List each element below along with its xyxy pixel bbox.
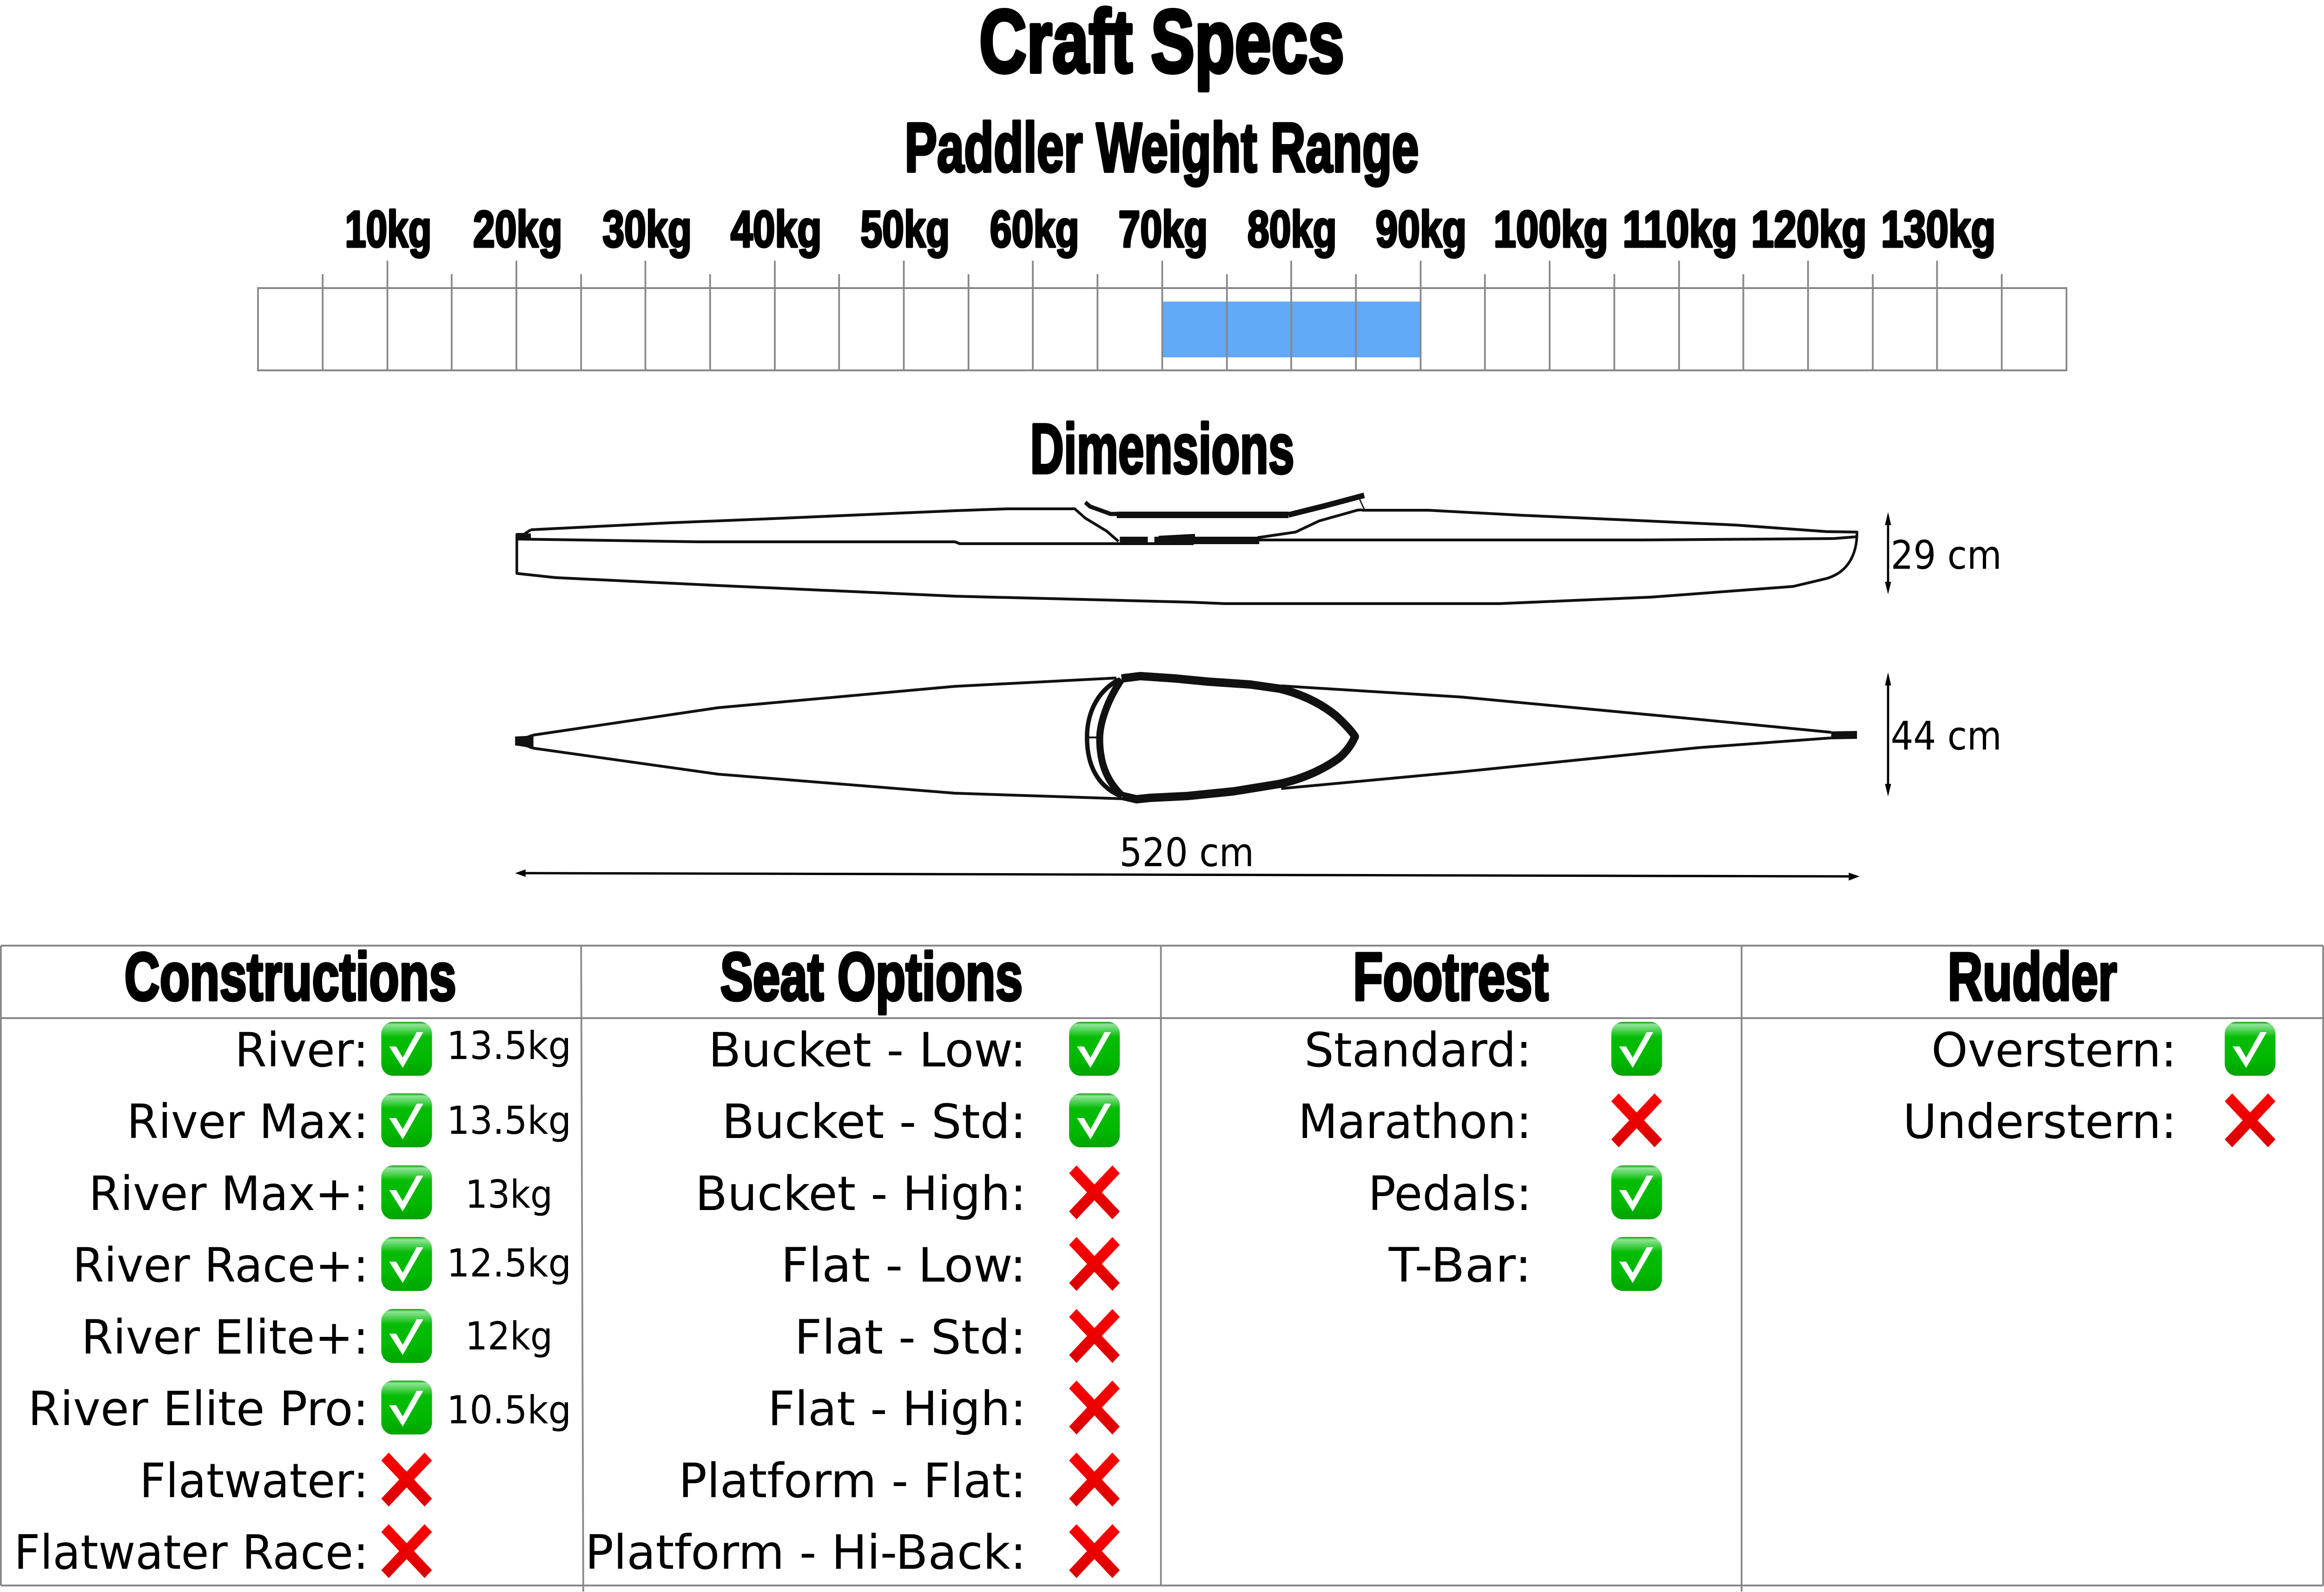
row: Flat - High: Flat - High:: [768, 1381, 1026, 1437]
row: River: [235, 1022, 571, 1078]
panel: footrest: [1298, 939, 1662, 1293]
heading: constructions: Constructions: [125, 939, 456, 1015]
dimension: length 520 cm: 520 cm: [1119, 830, 1254, 876]
scale labels: 90kg: [1376, 200, 1466, 258]
panel: rudder: [1903, 939, 2276, 1150]
row: Flat - High: [768, 1381, 1120, 1437]
heading: paddler weight range: Paddler Weight Range: [905, 108, 1419, 186]
row: Marathon: [1298, 1093, 1662, 1150]
kayak side view: [517, 495, 1857, 604]
row: Standard: Standard:: [1304, 1023, 1532, 1078]
scale labels: [345, 200, 1996, 258]
row: Marathon: Marathon:: [1298, 1094, 1532, 1150]
row: River Race+: 12.5kg: [447, 1241, 571, 1286]
row: T-Bar: T-Bar:: [1388, 1238, 1532, 1293]
row: River Elite Pro: River Elite Pro:: [28, 1381, 369, 1437]
row: River Max: 13.5kg: [447, 1099, 571, 1144]
row: River Max+: 13kg: [465, 1172, 553, 1217]
row: T-Bar: [1388, 1237, 1662, 1293]
row: River: River:: [235, 1023, 369, 1078]
row: Understern: Understern:: [1903, 1094, 2177, 1150]
row: Flat - Std: Flat - Std:: [794, 1310, 1026, 1365]
scale labels: 70kg: [1118, 200, 1208, 258]
panel: constructions: [14, 939, 571, 1580]
scale labels: 100kg: [1494, 200, 1608, 258]
row: River Race+: River Race+:: [73, 1238, 369, 1293]
kayak top view: [515, 676, 1857, 799]
scale labels: 50kg: [860, 200, 950, 258]
row: Platform - Hi-Back: Platform - Hi-Back:: [585, 1525, 1026, 1580]
dimension: depth 29 cm: [1885, 512, 2002, 594]
scale labels: 80kg: [1248, 200, 1337, 258]
row: Flatwater: Flatwater:: [139, 1454, 369, 1509]
row: River Elite+: River Elite+:: [81, 1310, 369, 1365]
row: Overstern: Overstern:: [1931, 1023, 2177, 1078]
row: River Elite Pro: 10.5kg: [447, 1388, 571, 1433]
table grid: [1, 946, 2323, 1592]
row: River Max: [127, 1093, 571, 1150]
row: Bucket - Low: Bucket - Low:: [708, 1023, 1026, 1078]
row: Standard: [1304, 1022, 1662, 1078]
scale labels: 10kg: [345, 200, 432, 258]
row: River: 13.5kg: [447, 1024, 571, 1069]
row: River Race+: [73, 1237, 571, 1293]
scale labels: 30kg: [602, 200, 692, 258]
dimension: length 520 cm: [515, 830, 1860, 881]
row: River Elite Pro: [28, 1381, 571, 1437]
dimension: width 44 cm: 44 cm: [1891, 713, 2002, 759]
row: River Elite+: 12kg: [465, 1314, 553, 1359]
row: Bucket - High: Bucket - High:: [695, 1166, 1026, 1222]
scale labels: 40kg: [731, 200, 822, 258]
heading: dimensions: Dimensions: [1030, 409, 1294, 488]
row: Flatwater Race: Flatwater Race:: [14, 1525, 369, 1580]
row: Platform - Flat: Platform - Flat:: [679, 1454, 1026, 1509]
heading: footrest: Footrest: [1353, 939, 1549, 1015]
panel: seat options: [585, 939, 1120, 1580]
scale labels: 120kg: [1751, 200, 1867, 258]
row: River Max: River Max:: [127, 1094, 369, 1150]
row: River Max+: [89, 1165, 553, 1222]
scale labels: 110kg: [1623, 200, 1737, 258]
row: Understern: [1903, 1093, 2276, 1150]
scale labels: 20kg: [473, 200, 562, 258]
weight range bar: [1162, 302, 1420, 357]
row: River Elite+: [81, 1309, 553, 1365]
cockpit rim: [1122, 676, 1355, 799]
scale labels: 130kg: [1881, 200, 1996, 258]
dimension: depth 29 cm: 29 cm: [1891, 533, 2002, 579]
row: Overstern: [1931, 1022, 2276, 1078]
heading: rudder: Rudder: [1948, 939, 2117, 1015]
row: Pedals: Pedals:: [1368, 1166, 1532, 1222]
chart: weight scale: [258, 200, 2067, 370]
row: Bucket - Std: Bucket - Std:: [722, 1094, 1026, 1150]
dimension: width 44 cm: [1885, 672, 2002, 796]
row: Pedals: [1368, 1165, 1662, 1222]
heading: seat options: Seat Options: [720, 939, 1023, 1015]
row: Flat - Low: Flat - Low:: [781, 1238, 1026, 1293]
row: River Max+: River Max+:: [89, 1166, 369, 1222]
row: Flat - Std: [794, 1309, 1120, 1365]
scale labels: 60kg: [990, 200, 1079, 258]
row: Flat - Low: [781, 1237, 1120, 1293]
